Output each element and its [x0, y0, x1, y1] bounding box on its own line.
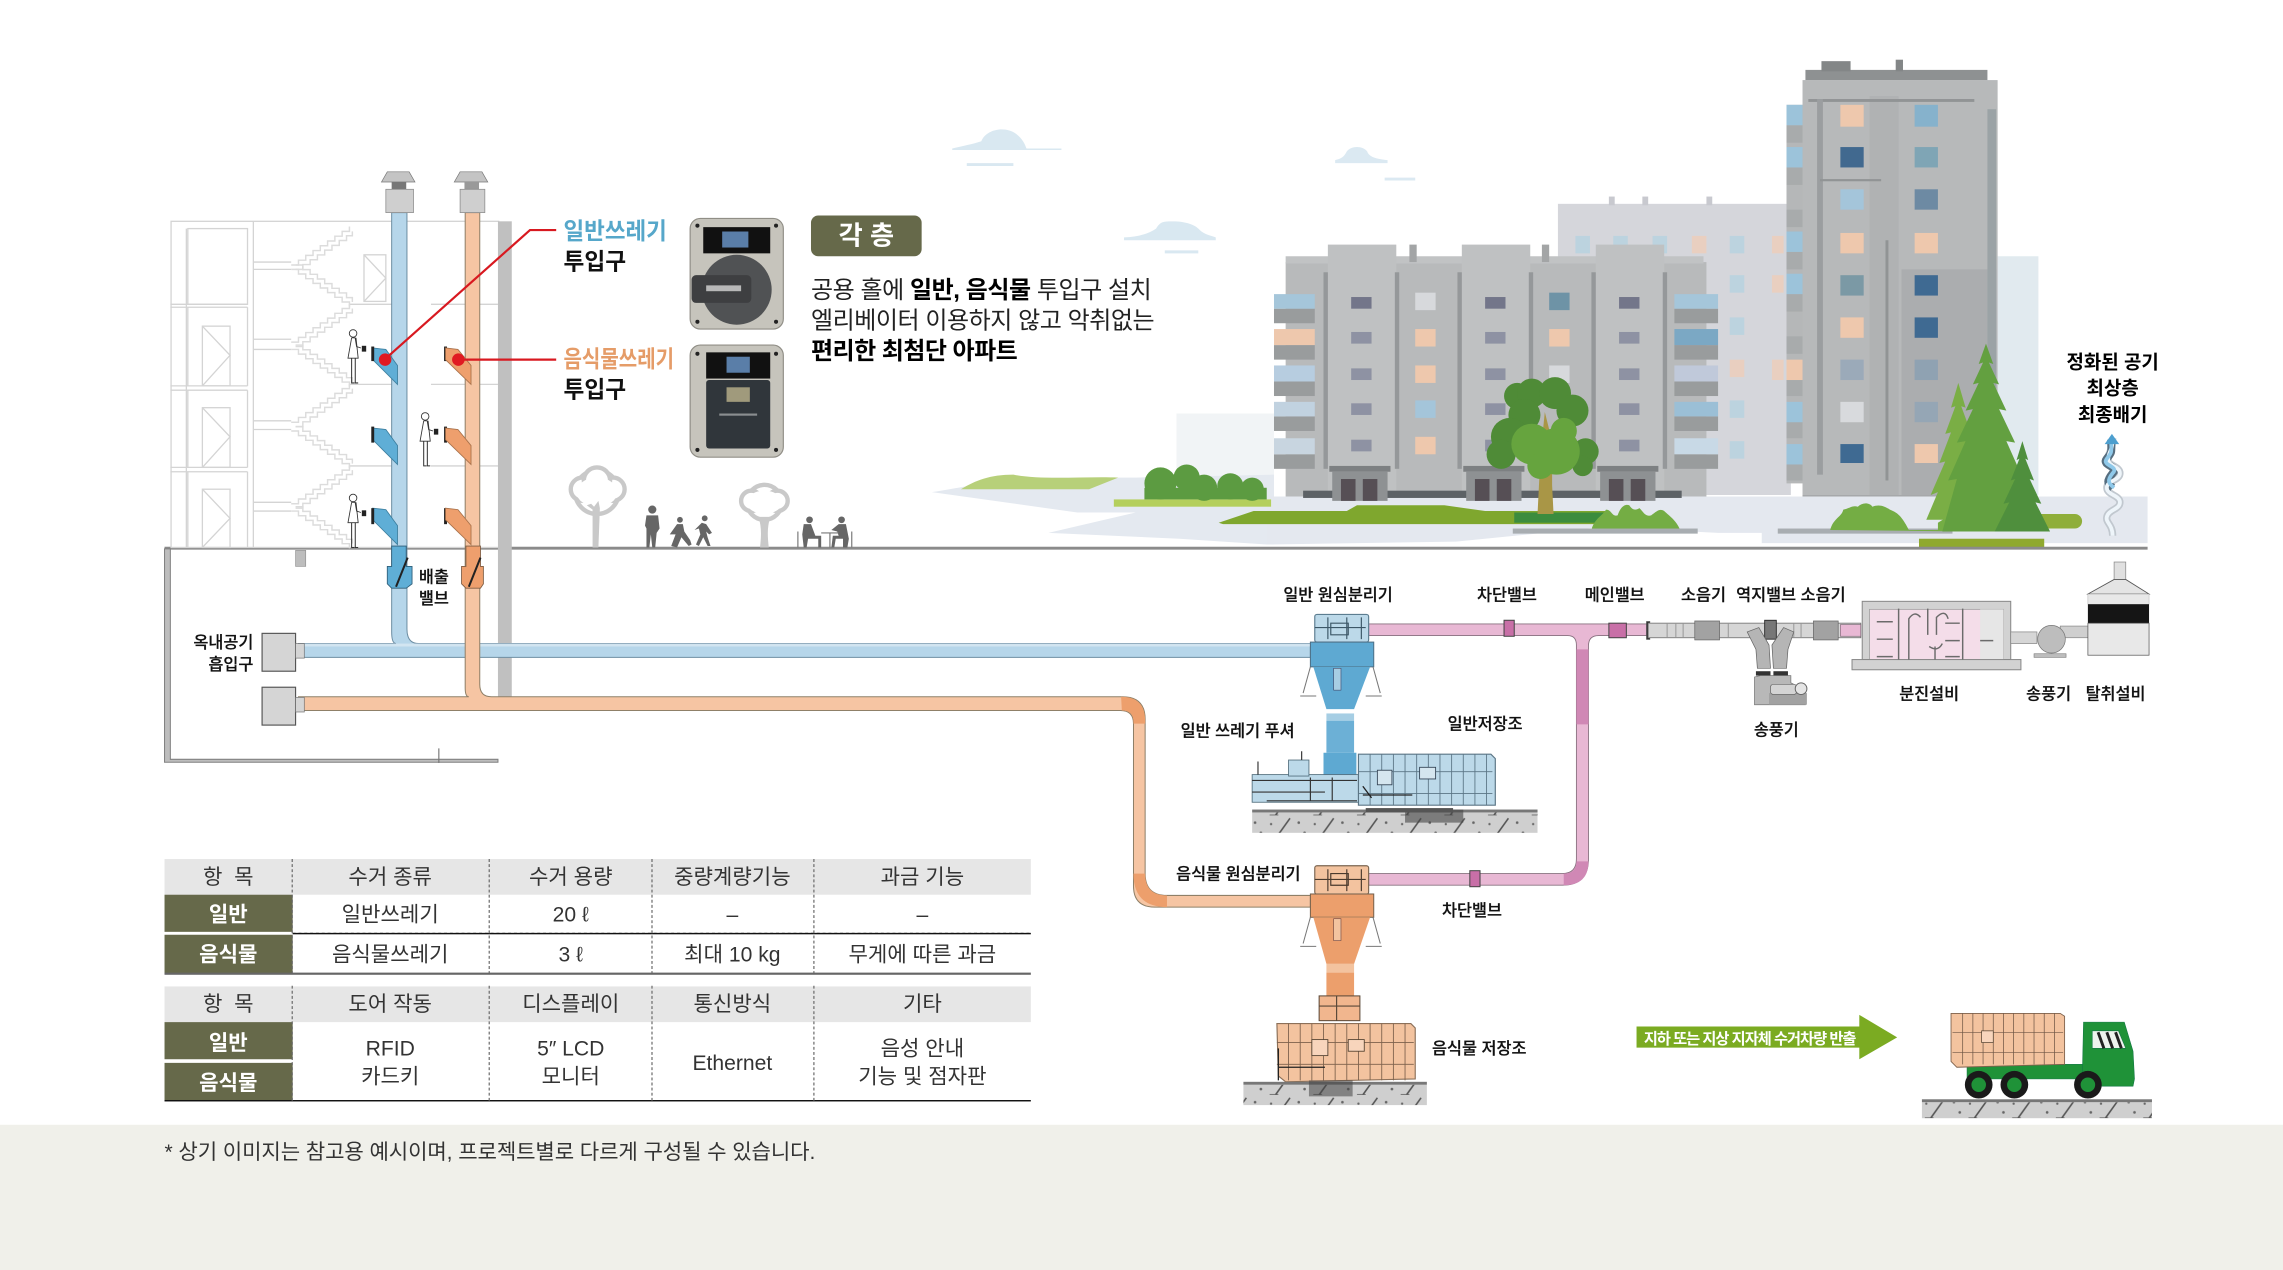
food cyclone — [1300, 866, 1382, 1021]
tower balconies — [1787, 105, 1804, 483]
table 1: capacity: 일반 — [209, 903, 248, 927]
badge: each floor — [811, 215, 922, 256]
table 1: capacity — [165, 859, 1031, 975]
left balconies — [1274, 294, 1315, 469]
callout lines — [384, 230, 556, 360]
description text: 엘리베이터 이용하지 않고 악취없는 — [811, 307, 1155, 334]
blue pipe: general waste — [298, 213, 1310, 657]
process labels: 음식물 원심분리기 — [1176, 865, 1301, 883]
dust collection unit — [1852, 601, 2021, 670]
label: general waste inlet: 투입구 — [563, 248, 626, 274]
table 2: functions: 디스플레이 — [522, 992, 619, 1016]
label: indoor air inlet: 흡입구 — [208, 656, 253, 674]
table 1: capacity: 최대 10 kg — [684, 943, 781, 967]
table 1: capacity: 수거 용량 — [529, 865, 613, 889]
outdoor people — [645, 506, 852, 547]
women figures — [348, 330, 438, 547]
building section — [170, 221, 499, 548]
description text: 편리한 최첨단 아파트 — [811, 338, 1018, 365]
label: discharge valve: 배출 — [419, 568, 449, 586]
label: discharge valve — [419, 568, 449, 608]
table 2: functions: 기능 및 점자판 — [858, 1064, 987, 1088]
table 1: capacity: 수거 종류 — [348, 865, 432, 889]
table 2: functions: Ethernet — [692, 1052, 772, 1075]
process labels: 송풍기 — [1754, 721, 1799, 739]
ground line — [165, 547, 2148, 550]
general pusher — [1252, 751, 1360, 802]
general inlet device — [690, 218, 783, 329]
table 1: capacity: 과금 기능 — [881, 865, 964, 889]
food ground — [1243, 1080, 1427, 1105]
lawn — [1219, 505, 1607, 524]
table 2: functions: 모니터 — [542, 1064, 600, 1088]
second blower — [2011, 625, 2089, 657]
process labels: 메인밸브 — [1585, 587, 1645, 605]
food inlet device — [690, 345, 783, 457]
ground pavement — [1267, 496, 2148, 545]
table 1: capacity: 일반쓰레기 — [342, 903, 439, 927]
process labels: 차단밸브 — [1442, 902, 1502, 920]
process labels: 탈취설비 — [2086, 686, 2146, 704]
deodorizer unit — [2088, 562, 2149, 655]
table 2: functions — [165, 986, 1031, 1101]
tower apartment — [1787, 60, 1998, 510]
main blower — [1747, 628, 1807, 705]
general cyclone — [1300, 614, 1382, 776]
label: food waste inlet: 음식물쓰레기 — [563, 346, 674, 372]
collection truck — [1951, 1013, 2134, 1099]
inlet chutes — [371, 347, 471, 545]
pink exhaust pipes — [1369, 624, 1647, 885]
table 2: functions: 항 목 — [203, 992, 254, 1016]
label: indoor air inlet — [193, 634, 253, 674]
table 1: capacity: 음식물 — [199, 943, 257, 967]
red marker dots — [379, 353, 465, 366]
label: food waste inlet: 투입구 — [563, 376, 626, 402]
table 1: capacity: – — [726, 904, 738, 927]
right balconies — [1674, 294, 1718, 469]
table 2: functions: 음식물 — [199, 1071, 257, 1095]
process labels: 역지밸브 소음기 — [1736, 587, 1846, 605]
table 1: capacity: 무게에 따른 과금 — [849, 943, 996, 967]
badge: each floor: 각 층 — [839, 221, 894, 251]
table 2: functions: 일반 — [209, 1031, 248, 1055]
process labels: 송풍기 — [2026, 686, 2071, 704]
table 1: capacity: 음식물쓰레기 — [332, 943, 448, 967]
label: purified air exhaust: 최종배기 — [2078, 404, 2147, 426]
vent caps — [381, 172, 488, 213]
general ground — [1252, 808, 1538, 833]
air inlet boxes — [262, 633, 304, 725]
process labels: 음식물 저장조 — [1432, 1040, 1527, 1058]
description text: 공용 홀에 일반, 음식물 투입구 설치 — [811, 277, 1152, 304]
small bushes left — [1114, 464, 1271, 507]
label: general waste inlet: 일반쓰레기 — [563, 218, 667, 244]
label: indoor air inlet: 옥내공기 — [193, 634, 253, 652]
green arrow: collection vehicle — [1637, 1015, 1897, 1059]
label: purified air exhaust: 최상층 — [2087, 378, 2139, 400]
process labels: 일반 원심분리기 — [1283, 587, 1393, 605]
center tree — [1487, 377, 1599, 514]
background clouds and distant landscape — [932, 129, 1415, 545]
table 2: functions: RFID — [366, 1038, 415, 1061]
process labels: 분진설비 — [1899, 686, 1959, 704]
process labels: 차단밸브 — [1477, 587, 1537, 605]
table 1: capacity: 항 목 — [203, 865, 254, 889]
table 2: functions: 통신방식 — [694, 992, 771, 1016]
label: general waste inlet — [563, 218, 667, 274]
description text — [811, 277, 1155, 365]
bushes by buildings — [1513, 503, 2082, 547]
truck ground — [1922, 1099, 2152, 1118]
outdoor trees — [571, 467, 788, 547]
spruce trees — [1926, 344, 2050, 531]
faded middle apartment — [1558, 197, 1791, 495]
label: discharge valve: 밸브 — [419, 590, 449, 608]
label: purified air exhaust: 정화된 공기 — [2067, 351, 2159, 373]
table 2: functions: 기타 — [903, 992, 942, 1016]
label: food waste inlet — [563, 346, 674, 402]
table 2: functions: 5″ LCD — [537, 1038, 604, 1061]
footer band — [0, 1125, 2283, 1270]
basement wall — [165, 221, 512, 763]
process labels: 일반저장조 — [1448, 715, 1523, 733]
process labels: 일반 쓰레기 푸셔 — [1181, 723, 1295, 741]
left apartment — [1274, 245, 1718, 501]
shutoff valves — [1470, 620, 1650, 887]
table 1: capacity: – — [916, 904, 928, 927]
table 1: capacity: 3 ℓ — [559, 944, 583, 967]
gray exhaust pipe with silencers — [1648, 620, 1861, 640]
discharge valves — [387, 546, 483, 588]
tower windows — [1840, 105, 1938, 463]
table 2: functions: 음성 안내 — [881, 1037, 964, 1061]
process labels — [1176, 587, 2146, 1058]
general storage tank — [1358, 754, 1495, 805]
faded background building right — [1998, 256, 2038, 495]
table 2: functions: 도어 작동 — [348, 992, 432, 1016]
left apartment windows — [1351, 293, 1639, 454]
food storage tank — [1277, 1024, 1415, 1082]
table 2: functions: 카드키 — [361, 1064, 419, 1088]
label: purified air exhaust — [2067, 351, 2159, 426]
green arrow: collection vehicle: 지하 또는 지상 지자체 수거차량 반출 — [1644, 1031, 1856, 1048]
orange pipe: food waste — [298, 213, 1310, 907]
icon: air squiggle arrow — [2105, 434, 2120, 536]
footnote: * 상기 이미지는 참고용 예시이며, 프로젝트별로 다르게 구성될 수 있습니다. — [165, 1140, 815, 1164]
entrances — [1303, 466, 1682, 501]
table 1: capacity: 중량계량기능 — [674, 865, 791, 889]
table 1: capacity: 20 ℓ — [553, 904, 589, 927]
process labels: 소음기 — [1681, 587, 1726, 605]
